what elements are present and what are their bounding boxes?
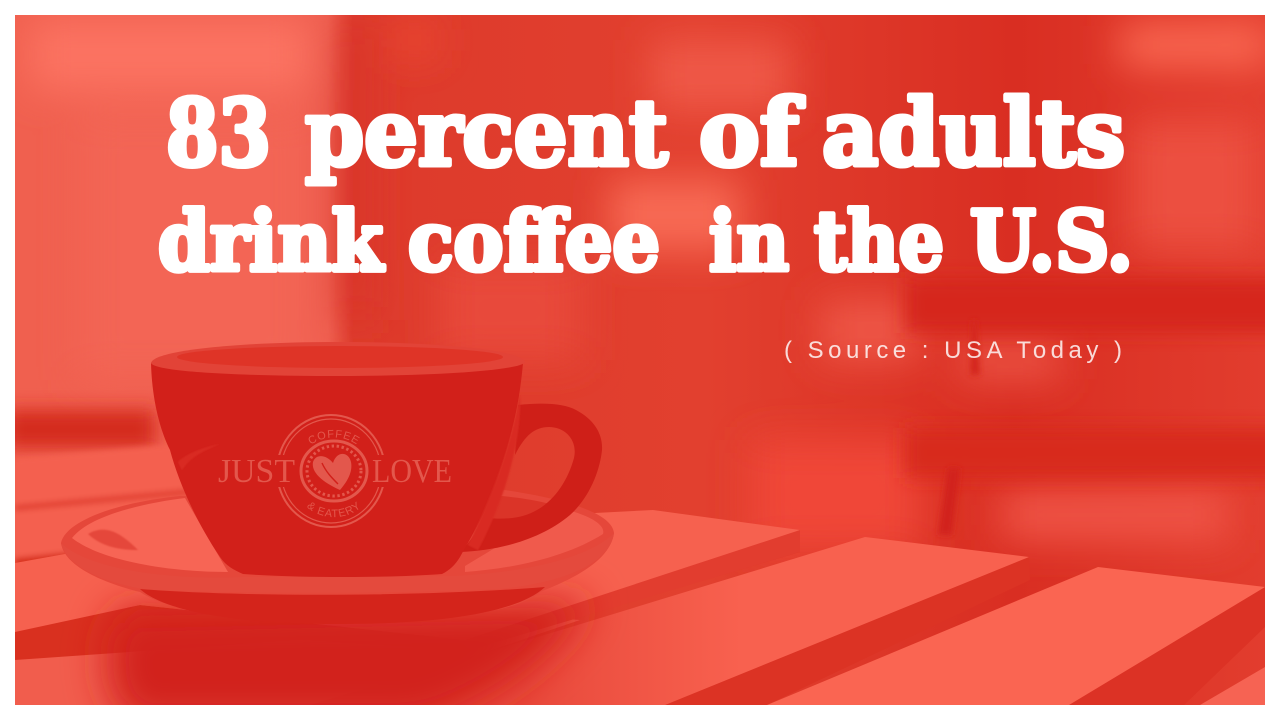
title line 2: coffee	[408, 194, 660, 290]
cup left highlight	[179, 447, 210, 468]
icon: coffee cup and saucer	[61, 342, 614, 624]
front left plank	[544, 620, 580, 632]
wooden table slats	[15, 442, 1265, 705]
logo heart beans	[313, 454, 351, 490]
title line 2: U.S.	[970, 194, 1133, 290]
title line 1: adults	[822, 79, 1125, 187]
icon: Just Love logo	[218, 414, 450, 528]
cup rim	[151, 342, 525, 376]
saucer shadow on table	[106, 600, 590, 720]
logo ring text: & EATERY	[308, 502, 358, 518]
logo ring text: COFFEE	[308, 430, 360, 444]
title line 1: 83	[166, 79, 271, 187]
gap behind wordmark	[276, 455, 284, 487]
title line 2: in	[709, 194, 789, 290]
saucer	[61, 488, 614, 624]
title line 1	[166, 79, 1125, 187]
logo wordmark: JUST	[218, 453, 295, 490]
logo ring text	[308, 430, 360, 518]
title	[158, 79, 1133, 290]
slat C side and surface	[1215, 588, 1265, 674]
title line 2	[158, 194, 1133, 290]
logo wordmark	[218, 460, 450, 483]
logo wordmark: LOVE	[372, 453, 452, 490]
saucer inner right	[465, 508, 603, 572]
cup right highlight	[468, 395, 520, 550]
back left ledges	[15, 445, 186, 563]
title line 1: percent	[305, 79, 668, 187]
coffee surface	[177, 346, 503, 368]
slat A side and surface	[15, 605, 293, 660]
title line 2: drink	[158, 194, 385, 290]
corner plank	[1200, 667, 1265, 705]
cup body	[151, 363, 523, 577]
cup handle	[461, 404, 602, 552]
saucer underside	[140, 587, 545, 624]
saucer inner left	[72, 498, 228, 572]
title line 2: the	[814, 194, 944, 290]
slat B side and surface	[666, 654, 804, 705]
saucer rim front	[61, 533, 614, 593]
source note: ( Source : USA Today )	[784, 337, 1122, 364]
title line 1: of	[699, 79, 804, 187]
